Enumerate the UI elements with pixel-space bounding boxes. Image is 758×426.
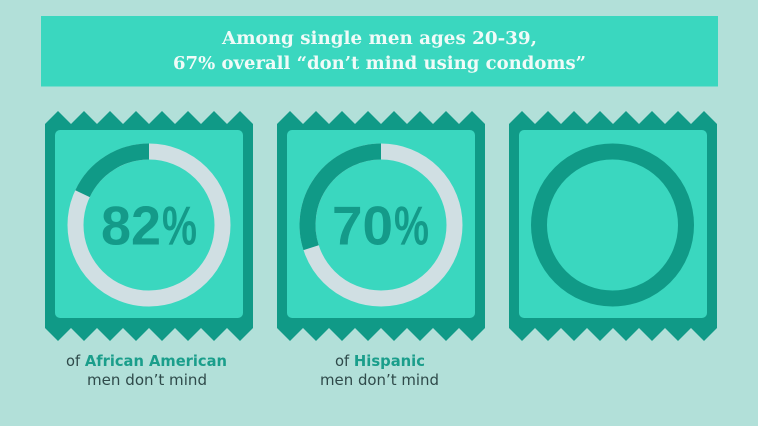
panel: Hispanic packet (277, 111, 485, 341)
header banner (41, 16, 718, 86)
panel: African American packet (45, 111, 253, 341)
title (173, 29, 586, 74)
caption: African American: of African American (66, 352, 227, 370)
packet wrapper (277, 111, 485, 341)
caption: of Hispanic: of Hispanic (335, 352, 425, 370)
packet inner panel (287, 130, 475, 318)
caption: men don't mind: men don’t mind (320, 371, 439, 389)
donut chart: 82% (76, 152, 222, 298)
value: 82%: % (162, 194, 197, 256)
panel: empty packet (509, 111, 717, 341)
packet inner panel (55, 130, 243, 318)
packet wrapper (509, 111, 717, 341)
caption: men don't mind: men don’t mind (87, 371, 207, 389)
title: 67% overall “don’t mind using condoms” (173, 54, 586, 74)
ring (539, 152, 686, 298)
value: 82% (101, 194, 197, 256)
title: Among single men ages 20-39, (221, 29, 537, 49)
value: 70%: % (394, 194, 429, 256)
value: 70% (332, 194, 429, 256)
value: 82%: 82 (101, 194, 161, 256)
value: 70%: 70 (332, 194, 393, 256)
packet wrapper (45, 111, 253, 341)
packet inner panel (519, 130, 707, 318)
donut chart: 70% (308, 152, 454, 298)
